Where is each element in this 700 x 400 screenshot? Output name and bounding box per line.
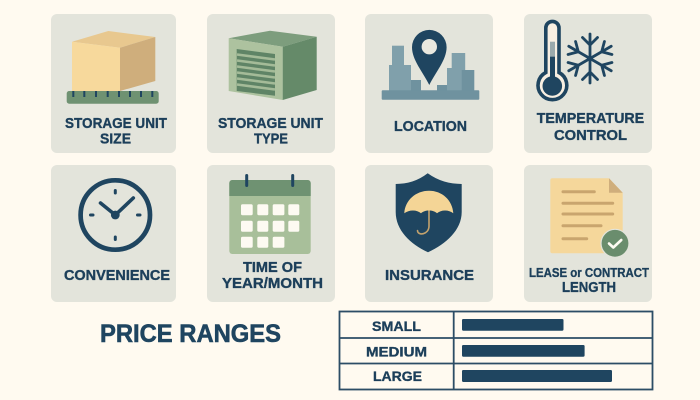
panel: lease or contract length <box>524 165 652 302</box>
icon: calendar <box>229 176 311 254</box>
panel: time of year/month <box>207 165 335 302</box>
row: small: SMALL <box>372 319 421 334</box>
label: temperature control <box>537 111 645 144</box>
panel: storage unit size <box>51 14 176 153</box>
label: lease or contract length: LENGTH <box>562 280 616 296</box>
panel: storage unit type <box>207 14 335 153</box>
label: temperature control: TEMPERATURE <box>537 111 645 127</box>
icon: shield with umbrella <box>396 173 462 252</box>
label: storage unit size: SIZE <box>100 132 131 148</box>
icon: snowflake <box>565 34 615 83</box>
label: lease or contract length: LEASE or CONTRACT <box>529 265 649 280</box>
label: storage unit type: STORAGE UNIT <box>218 116 323 132</box>
row: large: LARGE <box>373 369 422 384</box>
icon: cardboard box on ruler <box>67 31 159 104</box>
icon: thermometer <box>538 21 567 100</box>
label: time of year/month: YEAR/MONTH <box>222 276 323 292</box>
label: time of year/month <box>222 260 323 292</box>
row: small <box>372 319 564 334</box>
icon: contract document with check badge <box>550 178 629 257</box>
label: storage unit type: TYPE <box>254 132 288 148</box>
icon: map pin over city skyline <box>382 30 479 100</box>
label: convenience: CONVENIENCE <box>64 268 170 284</box>
icon: clock <box>81 180 150 250</box>
row: large <box>373 369 612 384</box>
label: time of year/month: TIME OF <box>243 260 302 276</box>
label: storage unit size <box>65 116 167 148</box>
panel: temperature control <box>524 14 652 153</box>
label: insurance: INSURANCE <box>385 268 474 284</box>
row: medium: MEDIUM <box>366 345 427 360</box>
label: storage unit size: STORAGE UNIT <box>65 116 167 132</box>
label: storage unit type <box>218 116 323 148</box>
row: medium <box>366 345 585 360</box>
label: temperature control: CONTROL <box>554 128 627 144</box>
heading: price ranges: PRICE RANGES <box>100 320 281 348</box>
table: price ranges <box>340 312 652 390</box>
panel: insurance <box>365 165 493 302</box>
panel: location <box>365 14 493 153</box>
panel: convenience <box>51 165 176 302</box>
icon: storage unit with roll-up door <box>229 31 317 100</box>
label: lease or contract length <box>529 265 649 296</box>
label: location: LOCATION <box>394 119 467 135</box>
